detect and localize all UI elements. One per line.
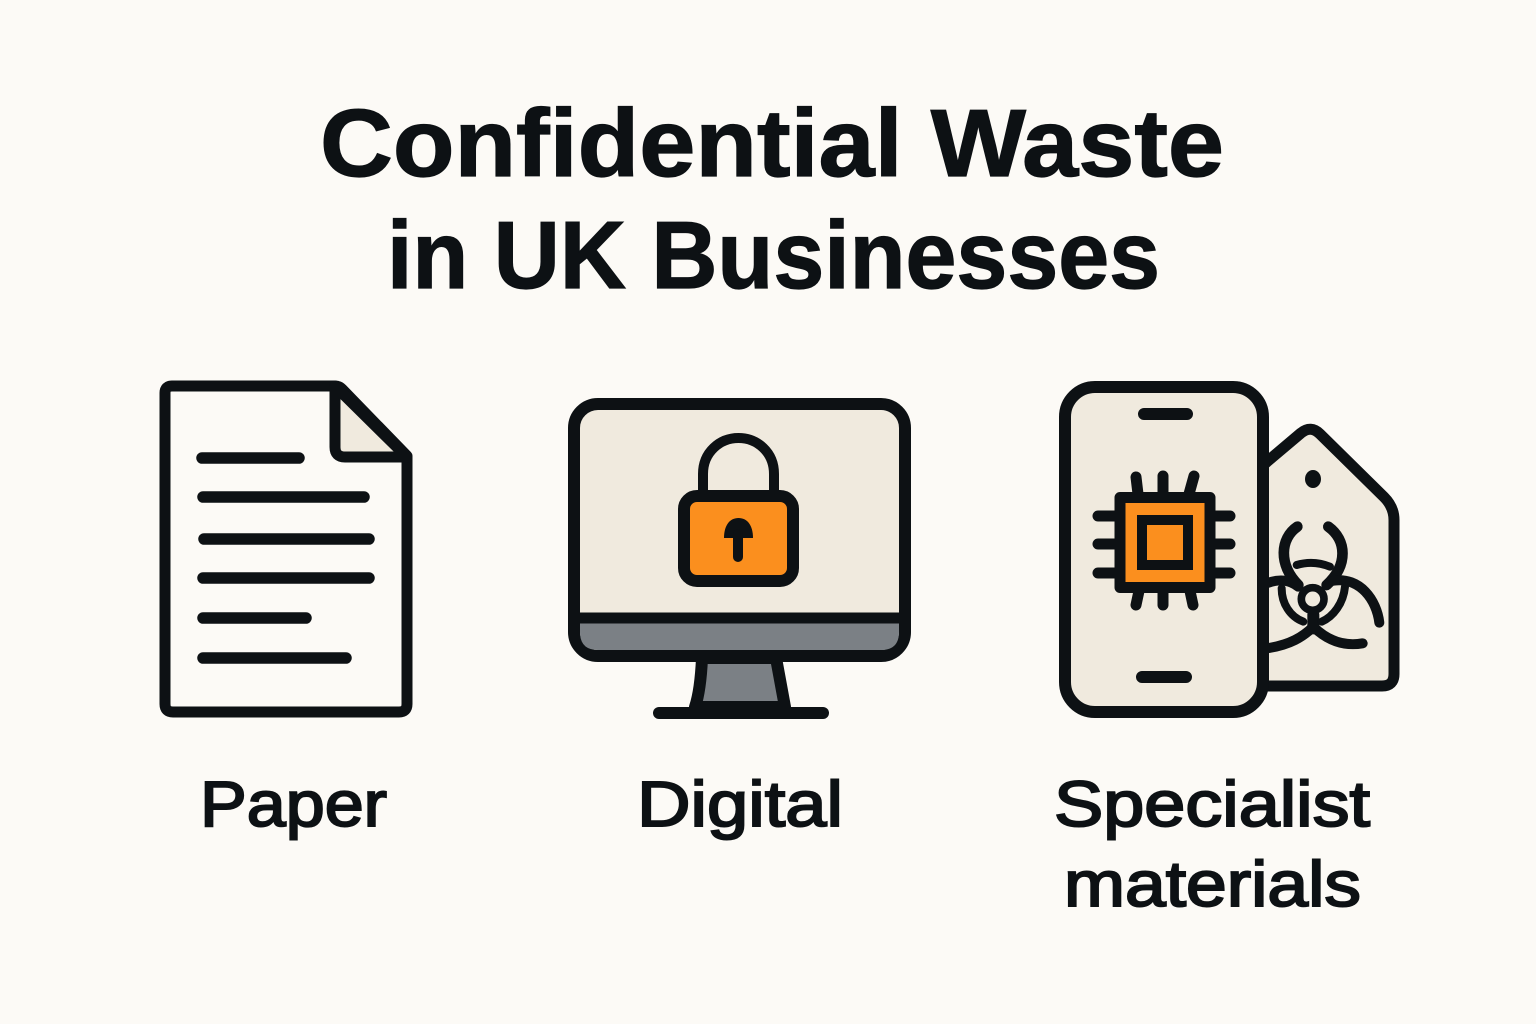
title: in UK Businesses [387,202,1160,309]
icon: computer monitor with padlock [574,404,905,713]
icon: phone with microchip [1065,387,1263,712]
microchip [1098,476,1230,605]
label: Paper: Paper [200,768,387,840]
label: Specialist materials: materials [1064,848,1361,920]
title: Confidential Waste [320,90,1224,197]
icon: biohazard tag [1262,429,1394,686]
label: Digital: Digital [637,768,843,840]
padlock [684,438,793,581]
biohazard symbol [1267,527,1379,648]
label: Specialist materials: Specialist [1054,768,1370,840]
label: Specialist materials [1054,768,1370,920]
title [320,90,1224,309]
icon: paper document [165,386,407,712]
